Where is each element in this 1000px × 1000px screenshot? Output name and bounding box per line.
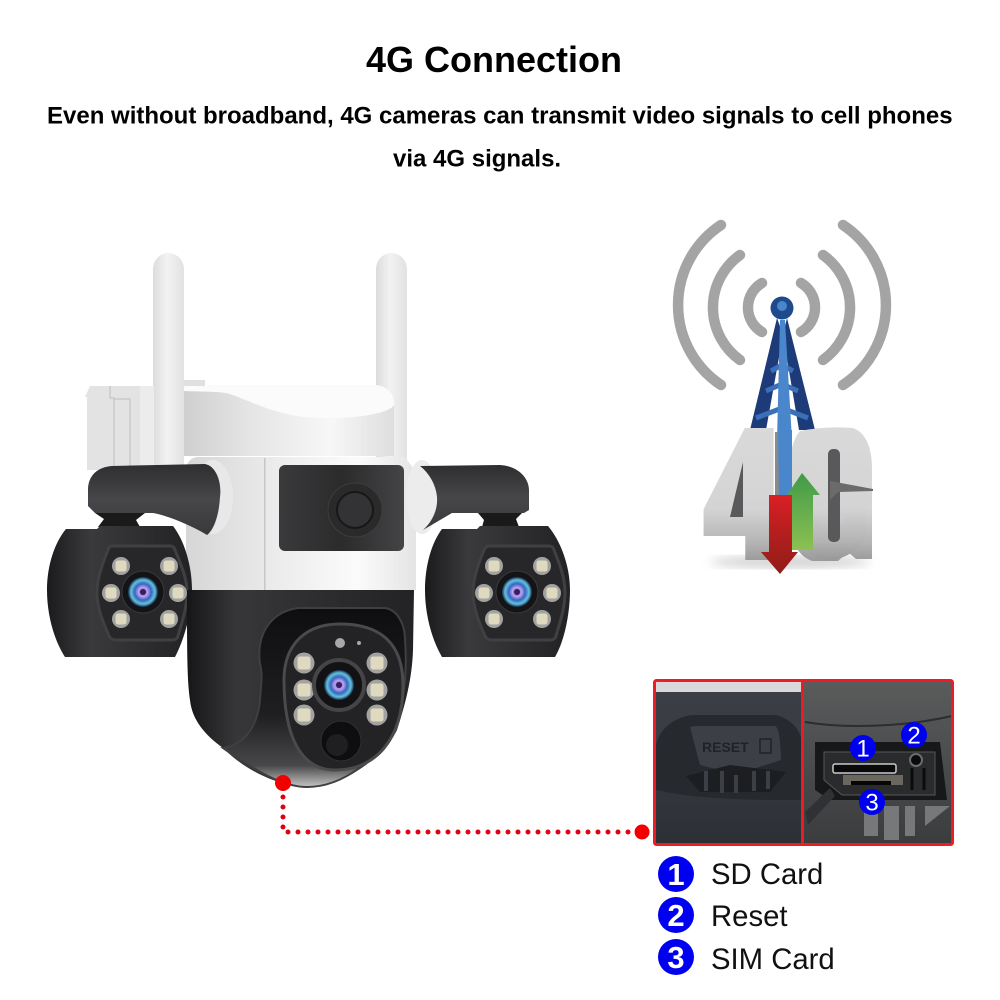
- right head face: [473, 546, 565, 640]
- panel round button: [328, 483, 382, 537]
- 4G dark inner faces: [730, 432, 873, 542]
- camera product illustration: [47, 253, 570, 787]
- main camera face: [284, 624, 403, 770]
- top dome: [184, 385, 394, 456]
- red down arrow: [761, 495, 798, 574]
- letter 4: 4: [707, 398, 781, 590]
- main LEDs: [294, 652, 388, 726]
- 4G shadow: [710, 556, 870, 568]
- dome white top surface: [184, 385, 394, 418]
- legend item 2: 2: [667, 898, 685, 933]
- badge 2: 2: [907, 722, 921, 750]
- left arm hinge: [193, 460, 233, 534]
- right arm: [420, 465, 529, 530]
- badge 2: [901, 722, 927, 750]
- legend item 3: [658, 939, 835, 976]
- legend item 2: Reset: [711, 900, 788, 933]
- indicator dots: [335, 638, 361, 648]
- left camera head: [47, 526, 192, 657]
- badge 1: [850, 735, 876, 762]
- badge 1: 1: [856, 736, 870, 762]
- dome left piece behind antenna: [140, 386, 154, 468]
- right neck: [478, 513, 522, 527]
- body seam: [264, 458, 266, 590]
- legend item 1: SD Card: [711, 858, 823, 891]
- 4G tower icon: [678, 225, 886, 590]
- rear mounting bracket: [85, 386, 145, 470]
- red connector line: [275, 775, 650, 840]
- detail photo panel: [654, 680, 952, 844]
- subtitle text: Even without broadband, 4G cameras can transmit video signals to cell phones: [47, 102, 953, 130]
- left head LEDs: [102, 557, 187, 628]
- title: 4G Connection: [366, 39, 622, 80]
- left neck: [95, 513, 145, 527]
- white middle body: [186, 457, 416, 590]
- signal arcs: [678, 225, 886, 385]
- dark front panel: [279, 465, 404, 551]
- left head face: [97, 546, 187, 640]
- legend item 2: [658, 897, 788, 933]
- green up arrow: [787, 473, 820, 550]
- legend item 1: 1: [667, 857, 685, 892]
- left photo: reset cover: RESET: [702, 739, 749, 755]
- main lens: [314, 660, 364, 710]
- black lower body: [187, 590, 414, 787]
- ball cavity: [223, 608, 406, 787]
- right head lens: [496, 571, 538, 613]
- legend item 3: SIM Card: [711, 943, 835, 976]
- small tab: [184, 380, 205, 386]
- badge 3: [859, 789, 885, 816]
- letter G: G: [790, 403, 869, 587]
- right photo: card slots: [802, 681, 952, 844]
- legend item 3: 3: [667, 940, 685, 975]
- legend: [658, 856, 835, 976]
- tower frame: [750, 318, 815, 440]
- right head LEDs: [475, 557, 561, 628]
- bracket detail: [110, 386, 130, 466]
- 4G backing plates: [722, 427, 872, 561]
- right camera head: [425, 526, 570, 657]
- right arm hinge: [406, 460, 438, 534]
- left antenna: [153, 253, 184, 470]
- left arm: [88, 464, 220, 535]
- left head lens: [122, 571, 164, 613]
- tower pole front: [778, 430, 792, 500]
- left photo: reset cover: [655, 681, 802, 844]
- subtitle text: [47, 102, 953, 172]
- right antenna: [376, 253, 407, 470]
- PIR sensor: [321, 721, 361, 761]
- red frame and divider: [654, 680, 952, 844]
- tower ball: [770, 296, 794, 320]
- legend item 1: [658, 856, 823, 892]
- subtitle text: via 4G signals.: [393, 146, 561, 172]
- badge 3: 3: [865, 790, 879, 816]
